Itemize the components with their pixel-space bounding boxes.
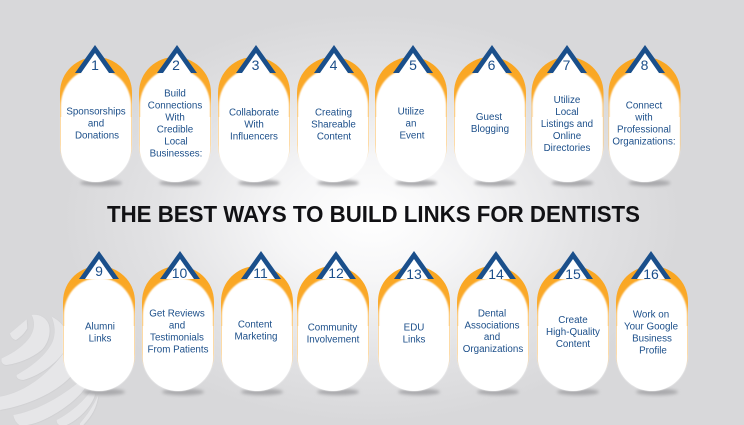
- text: Dental Associations and Organizations: Organizations: [463, 344, 523, 355]
- icon: chevron 11: [241, 251, 281, 279]
- icon: chevron 6: [472, 45, 512, 73]
- icon: chevron 4: [314, 45, 354, 73]
- card 8: [608, 45, 680, 186]
- text: Community Involvement: Community: [308, 322, 357, 334]
- text: Utilize Local Listings and Online Directories: Online: [553, 131, 582, 142]
- text: Creating Shareable Content: Content: [317, 132, 351, 142]
- icon: chevron 12: [316, 251, 356, 279]
- card 15: [537, 251, 609, 395]
- icon: chevron 5: [393, 45, 433, 73]
- card 7: [532, 45, 604, 186]
- icon: chevron 16: [631, 251, 671, 279]
- text: Collaborate With Influencers: Influencers: [230, 132, 278, 142]
- text: Dental Associations and Organizations: Dental: [478, 308, 506, 320]
- text: Build Connections With Credible Local Businesses: Connections: [148, 100, 202, 112]
- text: Dental Associations and Organizations: and: [484, 332, 500, 343]
- icon: chevron 14: [476, 251, 516, 279]
- text: EDU Links: EDU: [404, 322, 424, 334]
- text: Utilize Local Listings and Online Directories: Local: [555, 107, 579, 118]
- text: Guest Blogging: Blogging: [471, 124, 509, 135]
- text: Create High-Quality Content: Create: [558, 315, 588, 326]
- text: Sponsorships and Donations: and: [88, 118, 104, 130]
- text: Utilize Local Listings and Online Directories: Listings and: [541, 119, 593, 130]
- text: Utilize Local Listings and Online Directories: Utilize: [554, 95, 581, 106]
- card 3: [218, 45, 290, 186]
- text: Alumni Links: Links: [89, 334, 112, 344]
- number 11: 11: [253, 265, 268, 281]
- text: Utilize Local Listings and Online Directories: Directories: [544, 143, 591, 154]
- icon: chevron 2: [157, 45, 197, 73]
- number 2: 2: [172, 57, 180, 73]
- icon: chevron 13: [394, 251, 434, 279]
- text: Content Marketing: Marketing: [234, 332, 278, 342]
- text: Get Reviews and Testimonials From Patients: Testimonials: [150, 332, 204, 344]
- card 10: [142, 251, 214, 395]
- text: Work on Your Google Business Profile: Work on: [633, 310, 669, 320]
- text: Sponsorships and Donations: Donations: [75, 130, 119, 142]
- number 16: 16: [643, 266, 659, 282]
- text: Get Reviews and Testimonials From Patients: and: [169, 320, 185, 332]
- card 13: [378, 251, 450, 395]
- number 13: 13: [406, 266, 422, 282]
- text: Build Connections With Credible Local Businesses: With: [165, 112, 185, 124]
- icon: chevron 8: [625, 45, 665, 73]
- text: Alumni Links: Alumni: [85, 322, 115, 332]
- text: Create High-Quality Content: High-Quality: [546, 327, 600, 338]
- number 14: 14: [488, 266, 504, 282]
- text: Creating Shareable Content: Shareable: [311, 120, 356, 130]
- text: Build Connections With Credible Local Businesses: Businesses:: [150, 148, 202, 160]
- icon: chevron 3: [236, 45, 276, 73]
- text: Connect with Professional Organizations: Professional: [617, 124, 671, 136]
- number 3: 3: [252, 57, 260, 73]
- text: Collaborate With Influencers: Collaborate: [229, 108, 280, 118]
- text: Build Connections With Credible Local Businesses: Local: [164, 136, 188, 148]
- card 6: [454, 45, 526, 186]
- text: Utilize an Event: Event: [399, 130, 425, 142]
- text: Get Reviews and Testimonials From Patients: From Patients: [148, 344, 209, 356]
- card 5: [375, 45, 447, 186]
- icon: chevron 7: [547, 45, 587, 73]
- card 14: [457, 251, 529, 395]
- text: Build Connections With Credible Local Businesses: Build: [164, 88, 186, 100]
- card 11: [221, 251, 293, 395]
- card 4: [297, 45, 369, 186]
- text: Build Connections With Credible Local Businesses: Credible: [157, 124, 194, 136]
- card 12: [297, 251, 369, 395]
- icon: chevron 9: [79, 251, 119, 279]
- text: Utilize an Event: Utilize: [398, 106, 425, 118]
- number 8: 8: [641, 57, 649, 73]
- number 12: 12: [328, 265, 344, 281]
- decorative globe: [0, 315, 98, 425]
- text: Utilize an Event: an: [406, 118, 416, 130]
- text: Collaborate With Influencers: With: [244, 120, 264, 130]
- card 9: [63, 251, 135, 395]
- text: Work on Your Google Business Profile: Profile: [639, 346, 667, 356]
- icon: chevron 15: [553, 251, 593, 279]
- text: Sponsorships and Donations: Sponsorships: [66, 106, 126, 118]
- text: Content Marketing: Content: [238, 320, 272, 330]
- text: Creating Shareable Content: Creating: [315, 108, 352, 118]
- number 1: 1: [91, 57, 99, 73]
- card 1: [60, 45, 132, 186]
- text: Get Reviews and Testimonials From Patients: Get Reviews: [149, 308, 205, 320]
- icon: chevron 10: [160, 251, 200, 279]
- text: Connect with Professional Organizations: Organizations:: [612, 136, 676, 148]
- text: Connect with Professional Organizations: Connect: [626, 100, 663, 112]
- text: Work on Your Google Business Profile: Your Google: [624, 322, 679, 332]
- text: Guest Blogging: Guest: [476, 112, 502, 123]
- icon: chevron 1: [75, 45, 115, 73]
- text: Community Involvement: Involvement: [307, 334, 360, 346]
- number 15: 15: [565, 266, 581, 282]
- text: EDU Links: Links: [403, 334, 426, 346]
- number 9: 9: [95, 263, 103, 279]
- card 16: [616, 251, 688, 395]
- number 10: 10: [172, 265, 187, 281]
- number 4: 4: [330, 57, 338, 73]
- title: THE BEST WAYS TO BUILD LINKS FOR DENTISTS: [107, 201, 640, 227]
- text: Dental Associations and Organizations: Associations: [464, 320, 520, 332]
- number 5: 5: [409, 57, 417, 73]
- text: Connect with Professional Organizations: with: [634, 112, 653, 124]
- number 7: 7: [563, 57, 571, 73]
- number 6: 6: [488, 57, 496, 73]
- card 2: [139, 45, 211, 186]
- text: Work on Your Google Business Profile: Business: [632, 334, 672, 344]
- text: Create High-Quality Content: Content: [556, 339, 590, 350]
